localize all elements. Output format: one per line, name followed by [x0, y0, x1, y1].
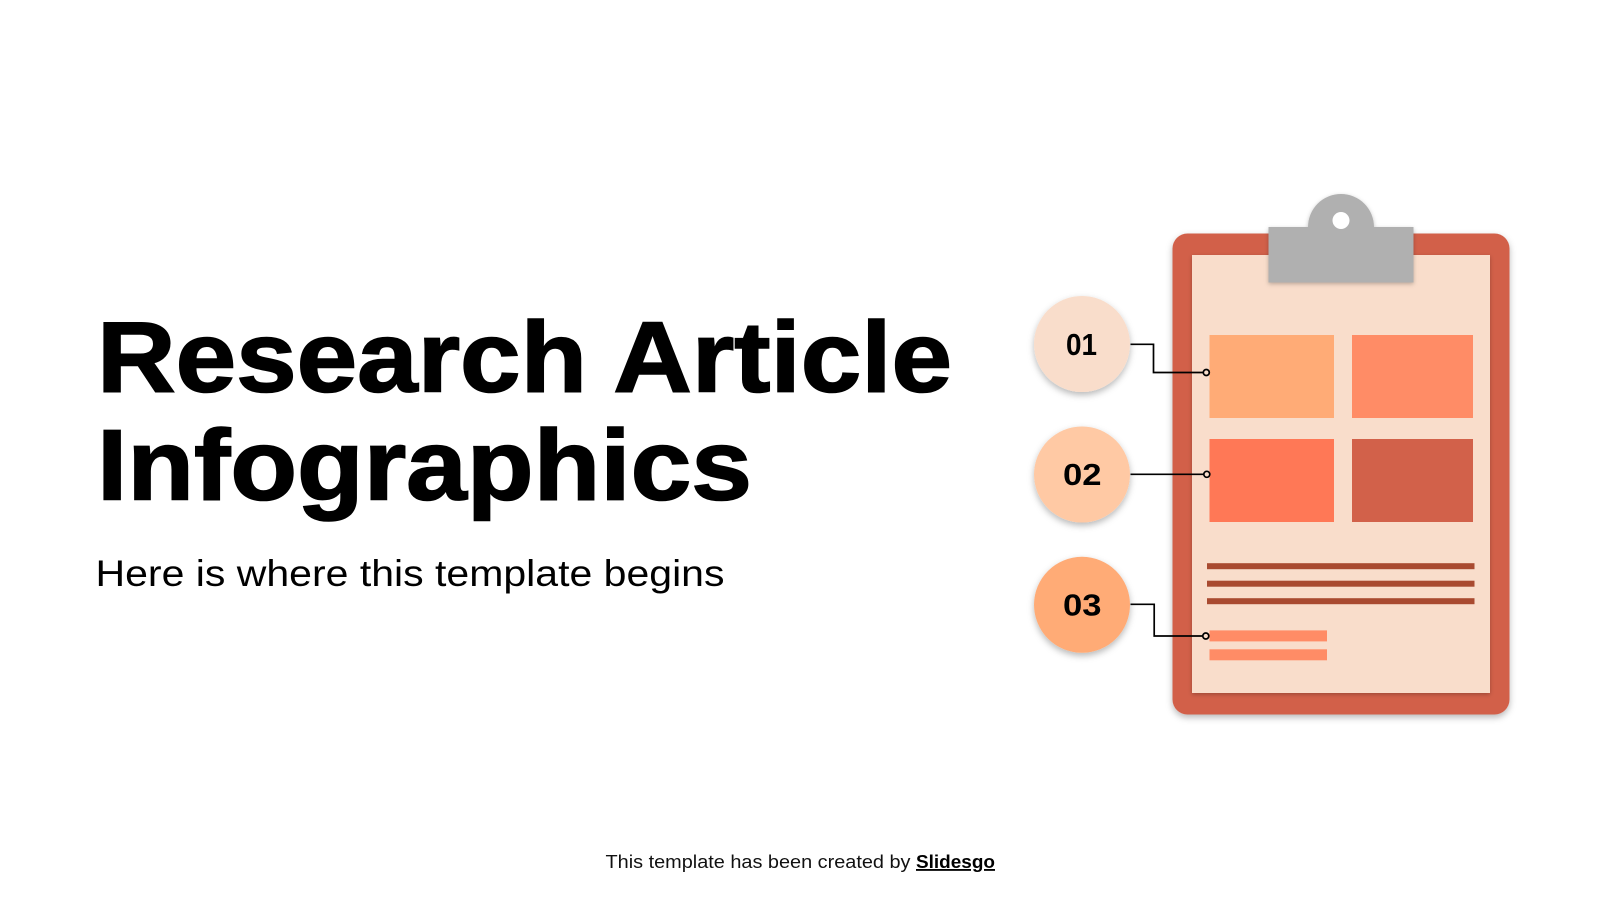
clipboard board — [1172, 234, 1510, 714]
text lines — [1207, 563, 1474, 604]
paper sheet — [1192, 255, 1490, 693]
callout 02: 02 — [1063, 457, 1102, 492]
metal clip — [1268, 194, 1414, 282]
title — [97, 302, 952, 522]
clipboard illustration — [1172, 194, 1510, 714]
callout 03 — [1034, 557, 1130, 653]
title: Research Article — [97, 302, 952, 414]
subtitle: Here is where this template begins — [96, 553, 724, 594]
short highlighted lines — [1210, 630, 1327, 660]
title: Infographics — [97, 410, 752, 522]
footer credit: Slidesgo — [916, 851, 995, 872]
footer credit: This template has been created by — [606, 851, 911, 872]
content block: top left — [1210, 335, 1334, 418]
connector 03 — [1130, 604, 1209, 639]
callout 03: 03 — [1063, 588, 1102, 622]
callout 02 — [1034, 426, 1130, 522]
content block: bottom left — [1210, 439, 1334, 522]
callout 01 — [1034, 296, 1130, 392]
connector 01 — [1130, 344, 1209, 376]
callout 01: 01 — [1066, 327, 1097, 362]
connector 02 — [1130, 471, 1210, 477]
content block: bottom right — [1352, 439, 1473, 522]
content block: top right — [1352, 335, 1473, 418]
